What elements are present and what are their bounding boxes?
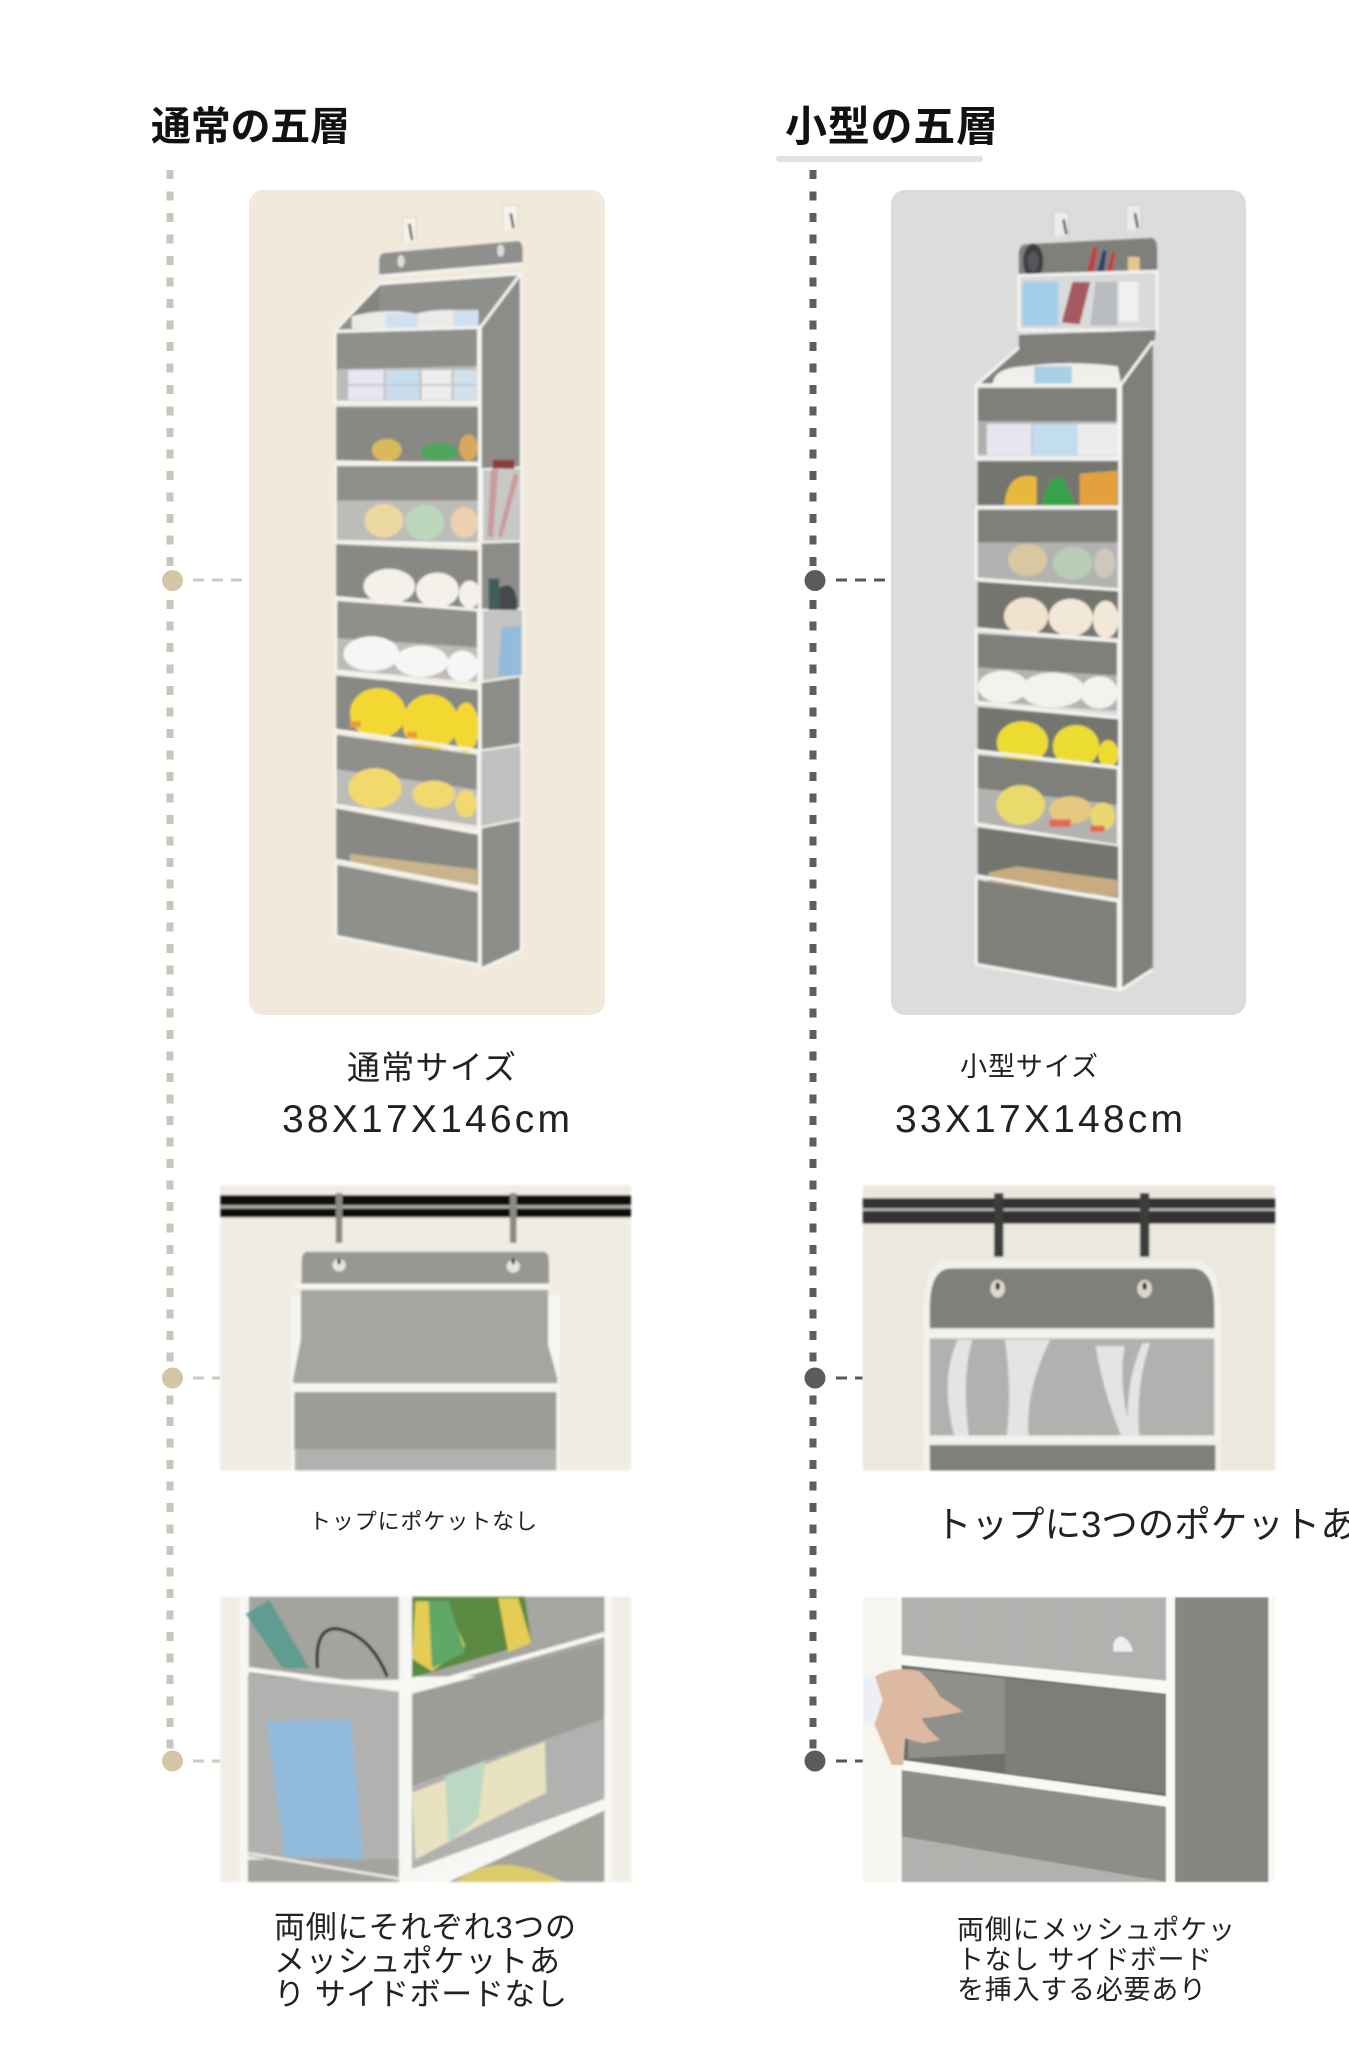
dimensions: regular size: 38X17X146cm xyxy=(282,1098,570,1141)
title: regular five-tier: 通常の五層 xyxy=(151,105,350,149)
title: compact five-tier: 小型の五層 xyxy=(785,103,998,150)
dimensions: compact size: 33X17X148cm xyxy=(895,1098,1183,1141)
caption: compact side board xyxy=(957,1915,1235,2005)
caption: regular side pockets: メッシュポケットあ xyxy=(274,1944,560,1979)
caption: compact side board: 両側にメッシュポケッ xyxy=(957,1915,1235,1945)
label: compact size: 小型サイズ xyxy=(960,1052,1098,1082)
panel: compact organizer photo xyxy=(891,190,1246,1015)
caption: compact side board: を挿入する必要あり xyxy=(957,1975,1206,2005)
timeline: compact column xyxy=(804,170,890,1772)
panel: compact top detail photo xyxy=(863,1185,1275,1471)
caption: regular side pockets: 両側にそれぞれ3つの xyxy=(274,1910,576,1945)
panel: regular top detail photo xyxy=(220,1185,631,1471)
label: regular size: 通常サイズ xyxy=(347,1049,516,1086)
panel: compact side board photo xyxy=(863,1597,1275,1882)
caption: regular side pockets: り サイドボードなし xyxy=(274,1977,567,2012)
panel: regular organizer photo xyxy=(249,190,605,1015)
panel: regular side pocket photo xyxy=(220,1597,631,1882)
caption: compact side board: トなし サイドボード xyxy=(957,1945,1212,1975)
caption: no top pocket: トップにポケットなし xyxy=(309,1509,537,1534)
caption: regular side pockets xyxy=(274,1910,576,2012)
timeline: regular column xyxy=(162,170,248,1772)
